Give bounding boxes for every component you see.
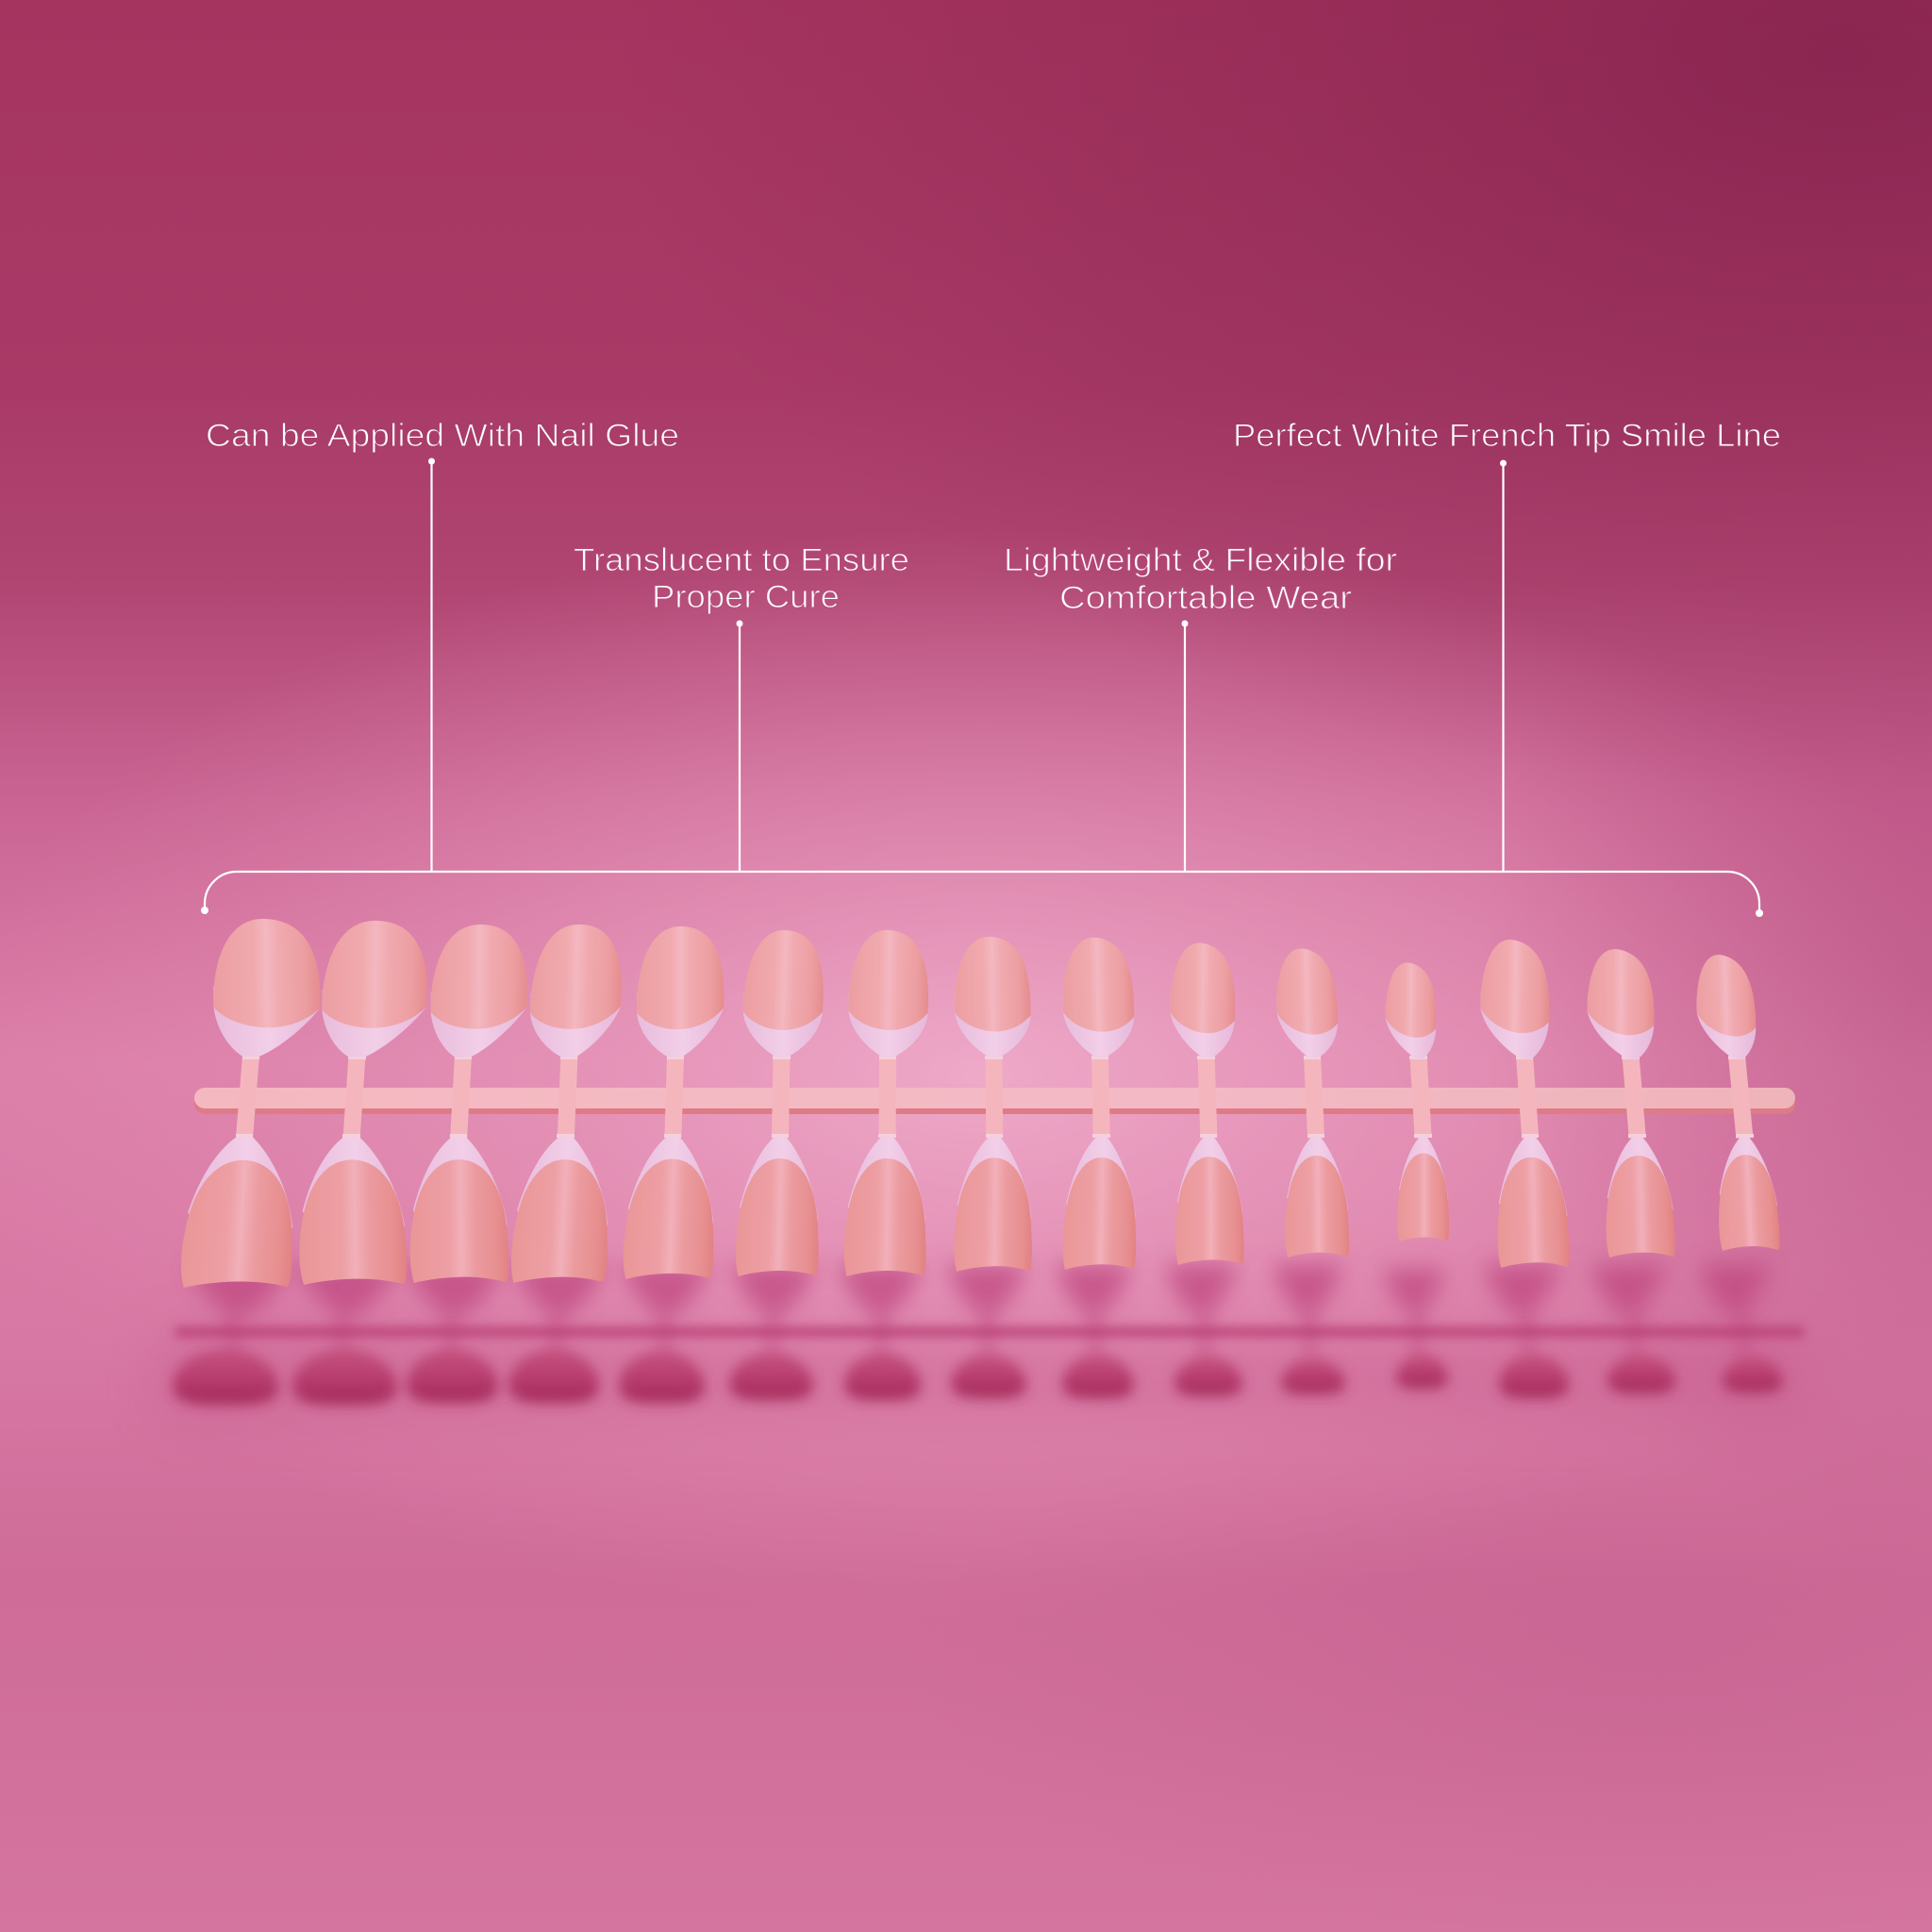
top nail 10 bbox=[1170, 939, 1236, 1061]
lower dome shadows of the nails bbox=[173, 1349, 1783, 1405]
callout: nail glue: Can be Applied With Nail Glue bbox=[206, 418, 679, 454]
rail shadow bbox=[175, 1326, 1805, 1338]
top nail 12 bbox=[1385, 958, 1437, 1062]
top nail 11 bbox=[1275, 943, 1339, 1062]
callout: translucent: Proper Cure bbox=[652, 579, 840, 615]
faint shadows of the stems bbox=[233, 1311, 1743, 1358]
callout: translucent: Translucent to Ensure bbox=[574, 542, 909, 578]
bottom nail 15 bbox=[1715, 1138, 1780, 1251]
top nail 9 bbox=[1061, 935, 1135, 1059]
top nail 1 bbox=[212, 918, 321, 1058]
callout: nail glue bbox=[206, 418, 679, 872]
bottom nail 3 bbox=[409, 1138, 509, 1283]
bottom nail 12 bbox=[1397, 1138, 1449, 1241]
top nail 15 bbox=[1695, 948, 1757, 1064]
callout: lightweight: Lightweight & Flexible for bbox=[1004, 542, 1397, 578]
callout: lightweight: Comfortable Wear bbox=[1059, 580, 1352, 616]
bottom nail 8 bbox=[954, 1138, 1034, 1272]
top nail 5 bbox=[637, 924, 724, 1058]
bottom nail 9 bbox=[1062, 1138, 1139, 1270]
top nail 4 bbox=[529, 922, 624, 1059]
bottom nail 2 bbox=[298, 1138, 407, 1285]
bottom nail 11 bbox=[1284, 1138, 1349, 1257]
top row of nails bbox=[212, 918, 1757, 1064]
bottom nail 14 bbox=[1603, 1138, 1675, 1257]
top nail 14 bbox=[1587, 942, 1655, 1064]
top nail 6 bbox=[741, 929, 825, 1058]
callout: french tip bbox=[1233, 418, 1781, 872]
nail rail bbox=[194, 1088, 1795, 1114]
callout: french tip: Perfect White French Tip Smile Line bbox=[1233, 418, 1781, 454]
callout: lightweight bbox=[1004, 542, 1397, 872]
top nail 13 bbox=[1479, 933, 1550, 1064]
top nail 8 bbox=[954, 935, 1031, 1058]
bottom row of nails bbox=[179, 1138, 1780, 1288]
floor shadow haze bbox=[160, 1335, 1802, 1415]
top nail 3 bbox=[430, 923, 528, 1058]
bracket spanning the nail set bbox=[201, 872, 1763, 917]
bottom nail 6 bbox=[735, 1138, 822, 1276]
top nail 2 bbox=[321, 920, 428, 1058]
top nail 7 bbox=[847, 928, 929, 1058]
bottom nail 5 bbox=[623, 1138, 718, 1279]
bottom nail 1 bbox=[179, 1138, 300, 1288]
bottom nail 4 bbox=[509, 1138, 614, 1283]
bottom nail 10 bbox=[1174, 1138, 1244, 1265]
callout: translucent bbox=[574, 542, 909, 872]
bottom nail 7 bbox=[843, 1138, 928, 1276]
bottom nail 13 bbox=[1494, 1138, 1570, 1268]
connector stems bbox=[236, 1056, 1754, 1138]
soft upper shadows of the nails bbox=[188, 1264, 1771, 1317]
